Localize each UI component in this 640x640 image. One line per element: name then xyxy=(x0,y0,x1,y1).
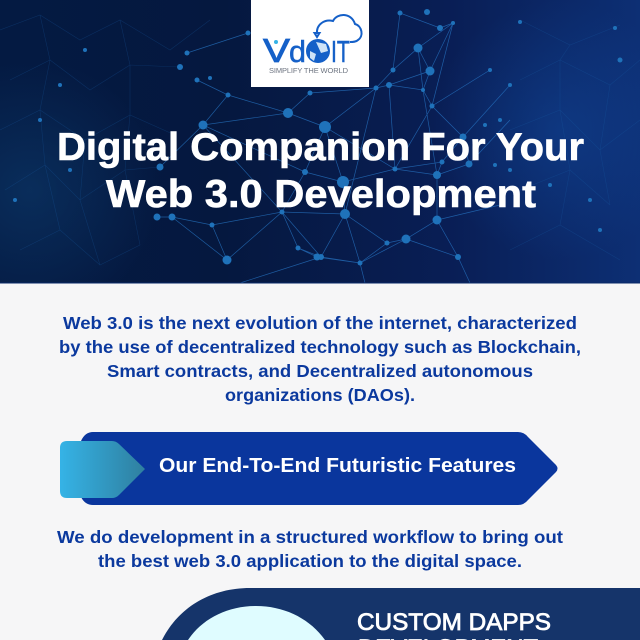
icon: cloud outline xyxy=(314,15,362,42)
icon: teal arrow tab xyxy=(60,441,145,498)
logo wordmark: V xyxy=(263,32,290,69)
title xyxy=(57,126,584,216)
logo card xyxy=(251,0,369,87)
title: Web 3.0 Development xyxy=(106,173,536,216)
banner label: Our End-To-End Futuristic Features xyxy=(159,454,516,477)
workflow paragraph xyxy=(57,527,563,571)
panel heading: CUSTOM DAPPS xyxy=(357,609,551,636)
icon circle xyxy=(188,606,325,640)
logo wordmark: d xyxy=(289,34,306,69)
intro paragraph: Web 3.0 is the next evolution of the internet, characterized xyxy=(63,313,577,333)
intro paragraph: organizations (DAOs). xyxy=(225,385,415,405)
workflow paragraph: We do development in a structured workflow to bring out xyxy=(57,527,563,547)
hero banner with network background xyxy=(0,0,640,284)
intro paragraph: Smart contracts, and Decentralized autonomous xyxy=(107,361,533,381)
intro paragraph xyxy=(59,313,581,405)
title: Digital Companion For Your xyxy=(57,126,584,169)
logo wordmark xyxy=(263,32,350,69)
logo wordmark: IT xyxy=(331,34,350,69)
workflow paragraph: the best web 3.0 application to the digital space. xyxy=(98,551,522,571)
features banner arrow xyxy=(60,432,558,505)
logo tagline: SIMPLIFY THE WORLD xyxy=(269,66,349,75)
panel: custom dapps development xyxy=(162,588,640,640)
intro paragraph: by the use of decentralized technology such as Blockchain, xyxy=(59,337,581,357)
